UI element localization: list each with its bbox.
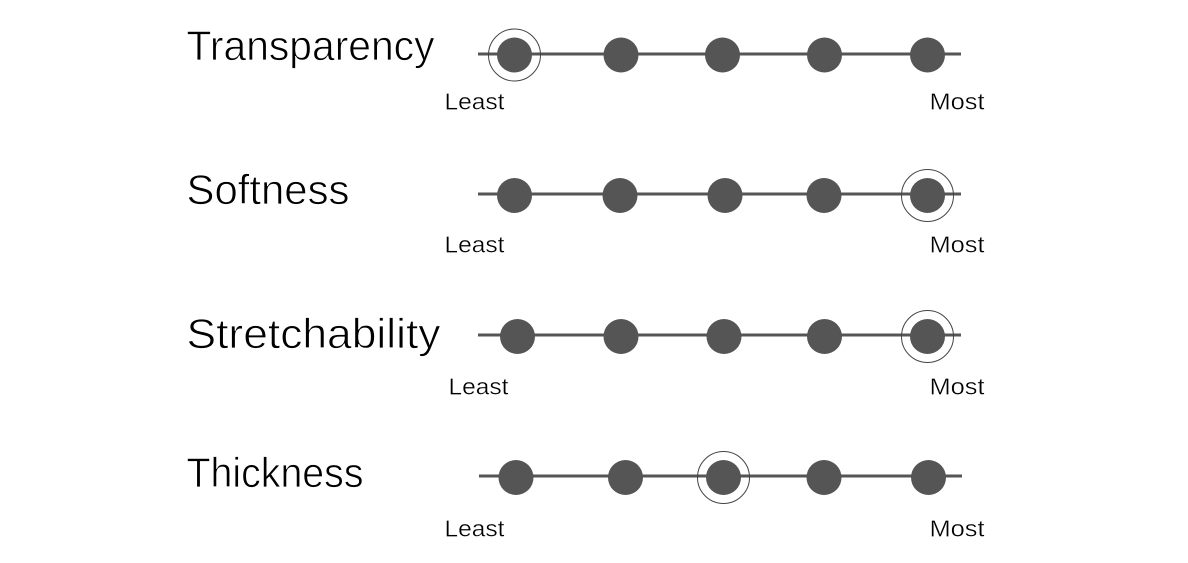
row: Stretchability (186, 310, 985, 400)
label: Least: Least (444, 516, 505, 542)
heading: Transparency: Transparency (186, 22, 434, 69)
label: Least: Least (444, 232, 505, 258)
label: Most: Most (930, 88, 985, 114)
label: Least: Least (448, 374, 509, 400)
heading: Thickness: Thickness (186, 449, 364, 496)
scale: Softness, most selected (478, 170, 961, 222)
label: Most: Most (930, 232, 985, 258)
row: Transparency (186, 22, 985, 114)
label: Most: Most (930, 374, 985, 400)
row: Thickness (186, 449, 985, 542)
row: Softness (186, 166, 985, 258)
scale: Transparency, least selected (478, 29, 961, 81)
heading: Softness: Softness (186, 166, 350, 213)
scale: Stretchability, most selected (478, 310, 961, 362)
label: Least: Least (444, 88, 505, 114)
label: Most: Most (930, 516, 985, 542)
scale: Thickness, middle selected (479, 452, 962, 504)
heading: Stretchability: Stretchability (186, 310, 440, 357)
